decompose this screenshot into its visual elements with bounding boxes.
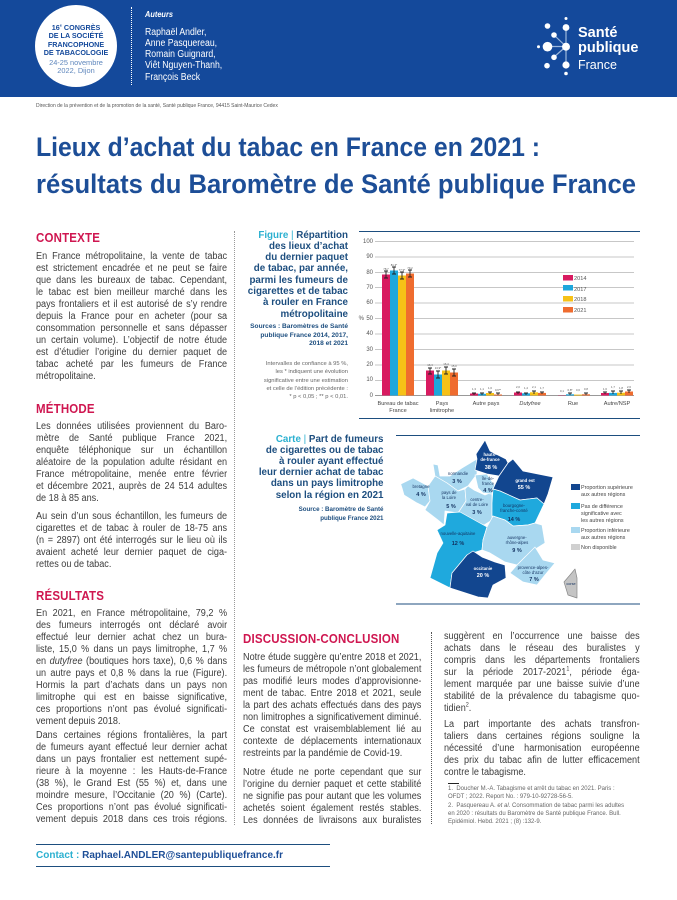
header band — [0, 0, 677, 97]
map of France: bretagne — [413, 484, 430, 489]
text: discussion 4: La part importante des achats transfron- — [444, 719, 640, 730]
figure caption: métropolitaine — [280, 309, 348, 320]
map of France: centre- — [470, 497, 484, 502]
map of France: 7 % — [529, 577, 539, 583]
bar chart: 40 — [366, 331, 374, 337]
dotted column divider left — [234, 231, 235, 825]
text: résultats 1: En 2021, en France métropolitaine, 79,2 % — [36, 608, 227, 618]
map of France: côte d’azur — [522, 570, 544, 575]
map legend: aux autres régions — [581, 492, 626, 498]
logo: Santé publique France: publique — [578, 40, 638, 56]
map caption: publique France 2021 — [320, 515, 384, 522]
bar chart: 90 — [366, 254, 374, 260]
logo: Santé publique France — [537, 17, 638, 76]
text: contexte — [36, 251, 228, 382]
authors: Anne Pasquereau, — [145, 38, 217, 49]
bar chart: 0 — [370, 393, 374, 399]
bar chart: Bureau de tabac — [377, 401, 419, 407]
text: résultats 2: dans un pays frontalier est nettement supé- — [36, 754, 227, 764]
map caption — [259, 434, 384, 522]
map caption: dans un pays limitrophe — [271, 478, 384, 489]
text: discussion 1: la part des achats effectués dans des pays — [243, 700, 421, 710]
map of France: nouvelle-aquitaine — [441, 531, 476, 536]
congress badge — [35, 5, 117, 87]
text: résultats 2: Ces proportions n’ont pas évolué significati- — [36, 802, 227, 812]
text: résultats 1: Hormis la part d’achats dans un pays non — [36, 680, 227, 690]
authors: Raphaël Andler, — [145, 26, 206, 38]
text: discussion 1: non limitrophes a significativement diminué. — [243, 712, 421, 722]
map of France: 3 % — [472, 510, 482, 516]
contact — [36, 844, 330, 867]
map of France: provence-alpes- — [518, 565, 549, 570]
authors: Romain Guignard, — [145, 49, 216, 60]
congress badge: 2022, Dijon — [57, 66, 95, 75]
region: Pays de la Loire — [425, 476, 466, 525]
footnotes: 1. Doucher M.-A. Tabagisme et arrêt du tabac en 2021. Paris : — [448, 786, 615, 792]
region: Centre-Val de Loire — [458, 486, 492, 525]
figure caption: du dernier paquet — [265, 252, 348, 263]
text: discussion 2 — [243, 767, 422, 826]
bar chart — [358, 231, 640, 419]
region: Nouvelle-Aquitaine — [430, 512, 487, 588]
map legend: Proportion inférieure — [581, 528, 630, 534]
text: discussion 3: achats dans le réseau des buralistes y — [444, 643, 640, 654]
heading: contexte: CONTEXTE — [36, 230, 100, 245]
text: contexte: pays frontaliers et il est autorisé de s’y rendre — [36, 299, 227, 310]
figure caption: publique France 2014, 2017, — [260, 332, 348, 339]
bar chart: 100 — [363, 239, 374, 245]
text: discussion 3: suggèrent en l’occurrence une baisse des — [444, 631, 640, 642]
title: résultats du Baromètre de Santé publique France — [36, 169, 636, 199]
bar chart: 10 — [366, 377, 374, 383]
footnotes: Epidémiol. Hebd. 2021 ; (8) :132-9. — [448, 819, 541, 825]
map legend: Pas de différence — [581, 504, 623, 510]
map of France: bourgogne- — [503, 503, 526, 508]
figure caption: parmi les fumeurs de — [249, 275, 348, 286]
bar chart: 16,4 — [443, 362, 449, 366]
footnotes — [448, 786, 624, 825]
map of France: 55 % — [518, 485, 530, 491]
text: résultats 1: ces proportions n’ont pas évolué significati- — [36, 704, 227, 714]
text: discussion 3: tidien2. — [444, 703, 471, 714]
text: contexte: consommation personnelle et sans dépasser — [36, 323, 227, 334]
text: discussion 2: ne signifie pas pour autant que les volumes — [243, 791, 421, 802]
bar chart: 16,4 — [427, 363, 433, 367]
region: Bourgogne-Franche-Comté — [492, 489, 544, 526]
bar chart: 1,6 — [488, 386, 492, 390]
text: méthode 2: (n = 2897) ont été interrogés sur le lieu où ils — [36, 535, 227, 546]
text: méthode 2 — [36, 511, 227, 570]
bar chart: 0,8* — [568, 388, 573, 392]
title: Lieux d’achat du tabac en France en 2021 : — [36, 132, 540, 162]
text: méthode 2: rettes ou de tabac. — [36, 559, 111, 570]
bar chart: 15,0 — [451, 364, 457, 368]
text: méthode 1: de 18 à 85 ans. — [36, 492, 99, 504]
bar chart: 0,6 — [576, 388, 580, 392]
map legend: les autres régions — [581, 518, 624, 524]
figure caption: Sources : Baromètres de Santé — [250, 323, 348, 330]
congress badge: FRANCOPHONE — [48, 40, 104, 49]
map of France: grand est — [515, 478, 535, 483]
text: méthode 1: Les données utilisées proviennent du Baro- — [36, 420, 227, 432]
region: Île-de-France — [475, 474, 495, 494]
logo: Santé publique France: Santé — [578, 25, 618, 41]
text: discussion 1 — [243, 652, 422, 758]
map of France: île-de- — [481, 476, 495, 481]
text: discussion 1: contexte de déplacements internationaux — [243, 736, 421, 746]
text: résultats 1: limitrophe qui est en baisse significative, — [36, 692, 227, 702]
bar chart: 1,7 — [540, 386, 544, 390]
heading: méthode: MÉTHODE — [36, 401, 95, 416]
bar chart: 50 — [366, 316, 374, 322]
congress badge: DE TABACOLOGIE — [44, 48, 108, 57]
map of France: 3 % — [452, 479, 462, 485]
bar chart: 1,3 — [472, 387, 476, 391]
map of France: 20 % — [477, 573, 489, 579]
bar chart: Pays — [436, 401, 448, 407]
text: résultats 1: en dutyfree (boutiques hors taxe), 0,6 % dans — [36, 656, 227, 666]
map legend — [571, 484, 633, 551]
title — [36, 132, 636, 199]
bar chart: 60 — [366, 300, 374, 306]
text: discussion 4 — [444, 719, 640, 778]
figure caption: et celle de l’édition précédente : — [266, 386, 348, 392]
text: résultats 2: moindre mesure, l’Occitanie (20 %) (Carte). — [36, 790, 227, 800]
map of France — [396, 435, 640, 604]
region: Hauts-de-France — [475, 440, 508, 476]
text: résultats 2: Dans certaines régions frontalières, la part — [36, 730, 227, 740]
text: contexte: le tabac est bien meilleur marché dans les — [36, 287, 227, 298]
region: Corse — [564, 569, 577, 598]
text: résultats 1: effectué leur dernier achat chez un bura- — [36, 632, 227, 642]
text: discussion 3: sur la période 2017-20211, période éga- — [444, 667, 640, 678]
figure caption: 2018 et 2021 — [309, 340, 348, 347]
region: Auvergne-Rhône-Alpes — [482, 516, 545, 565]
congress badge: 24-25 novembre — [49, 58, 103, 67]
bar chart: 13,9* — [435, 366, 442, 370]
bar chart: 77,9* — [399, 268, 406, 272]
figure caption: Intervalles de confiance à 95 %, — [266, 361, 348, 367]
map of France: corse — [566, 582, 576, 586]
text: discussion 3: lement marquée par une baisse suivie d’une — [444, 679, 640, 690]
congress badge: 16e CONGRÈS — [52, 23, 100, 32]
dotted column divider — [431, 632, 432, 824]
map of France: val de Loire — [466, 502, 489, 507]
bar chart: 78,7 — [383, 267, 389, 271]
text: méthode 2: avaient acheté leur dernier paquet de ciga- — [36, 547, 227, 558]
bar chart: 2,6 — [627, 385, 631, 389]
text: contexte: métropolitaine. — [36, 371, 96, 382]
chart legend: 2014 — [574, 276, 586, 282]
figure caption: significative entre une estimation — [264, 378, 348, 384]
bar chart: Dutyfree — [519, 401, 541, 407]
bar chart: 81,3* — [391, 263, 398, 267]
map of France: de-france — [480, 457, 500, 462]
map caption: Source : Baromètre de Santé — [299, 506, 384, 513]
text: contexte: que dans les bureaux de tabac. Cependant, — [36, 275, 227, 286]
bar chart: 1,6 — [603, 387, 607, 391]
figure caption: Figure | Répartition — [258, 230, 348, 240]
chart legend — [563, 275, 586, 314]
footnotes: en 2020 : résultats du Baromètre de Santé publique France. Bull. — [448, 811, 621, 817]
map of France: rhône-alpes — [506, 540, 528, 545]
bar chart: 0,1 — [560, 389, 564, 393]
text: discussion 2: l’origine du dernier paquet et cette stabilité — [243, 779, 421, 790]
text: discussion 1: pas modifié leurs modes d’approvisionne- — [243, 676, 421, 686]
text: résultats 1 — [36, 608, 227, 726]
map of France: la Loire — [442, 495, 457, 500]
map of France: pays de — [441, 490, 457, 495]
bar chart: % — [359, 316, 365, 322]
text: discussion 1: Ce constat est vraisemblablement lié au — [243, 724, 421, 734]
bar chart: 70 — [366, 285, 374, 291]
map of France: 38 % — [485, 465, 497, 471]
text: résultats 2: vement depuis 2018 dans ces trois régions. — [36, 814, 227, 824]
map of France: 9 % — [512, 548, 522, 554]
figure caption: les * indiquent une évolution — [275, 369, 348, 375]
dotted divider — [131, 7, 132, 85]
map of France: 5 % — [446, 504, 456, 510]
region: Normandie — [433, 459, 477, 491]
map legend: aux autres régions — [581, 535, 626, 541]
map caption: Carte | Part de fumeurs — [276, 434, 384, 444]
map of France: auvergne- — [507, 535, 527, 540]
text: méthode 2: Au sein d’un sous échantillon, les fumeurs de — [36, 511, 227, 522]
region: Occitanie — [450, 551, 506, 598]
text: discussion 4: taliers dans certaines régions souligne la — [444, 731, 640, 742]
bar chart: 80 — [366, 270, 374, 276]
text: résultats 1: liste, 15,0 % dans un pays limitrophe, 1,7 % — [36, 644, 227, 654]
text: contexte: tabac acheté par les fumeurs de France — [36, 359, 227, 370]
figure caption — [248, 230, 348, 400]
bar chart: 0,6** — [495, 388, 502, 392]
region: Grand Est — [493, 459, 553, 504]
map of France: occitanie — [474, 566, 493, 571]
bar chart: 0,8 — [584, 387, 588, 391]
bar chart: France — [389, 408, 407, 414]
bar chart: limitrophe — [430, 408, 454, 414]
text: résultats 1: un autre pays et 0,8 % dans la rue (Figure). — [36, 668, 227, 678]
authors: François Beck — [145, 72, 200, 83]
text: discussion 2: Les données de livraisons aux buralistes — [243, 815, 421, 826]
text: discussion 1: ment de tabac. Entre 2018 et 2021, seule — [243, 688, 421, 698]
text: discussion 3 — [444, 631, 640, 714]
figure caption: à rouler en France — [263, 297, 348, 308]
map legend: significative avec — [581, 511, 622, 517]
text: discussion 1: restreints par la pandémie de Covid-19. — [243, 748, 402, 758]
bar chart: Rue — [568, 401, 578, 407]
text: discussion 4: des prix du tabac afin de lutter efficacement — [444, 755, 640, 766]
bar chart: 30 — [366, 347, 374, 353]
text: contexte: un certain volume). L’objectif de notre étude — [36, 335, 227, 346]
text: méthode 2: cigarettes et de tabac à rouler de 18-75 ans — [36, 523, 227, 534]
logo: Santé publique France: France — [578, 58, 617, 72]
bar chart: 1,7 — [611, 385, 615, 389]
text: discussion 4: contre le tabagisme. — [444, 767, 526, 778]
text: résultats 2 — [36, 730, 228, 824]
text: contexte: est strictement encadrée et ne peut se faire — [36, 263, 227, 274]
bar chart: Autre pays — [473, 401, 500, 407]
region: Bretagne — [401, 478, 430, 507]
text: méthode 1: France métropolitaine, menée entre février — [36, 468, 227, 480]
map of France: 12 % — [452, 541, 464, 547]
bar chart: 1,8 — [619, 386, 623, 390]
region: Provence-Alpes-Côte d'Azur — [510, 547, 555, 585]
text: discussion 1: les fumeurs de métropole n’ont globalement — [243, 664, 421, 674]
figure caption: de tabac, par année, — [254, 263, 348, 274]
heading: résultats: RÉSULTATS — [36, 588, 104, 603]
text: discussion 3: compris dans les départements frontaliers — [444, 655, 640, 666]
map of France: 14 % — [508, 517, 520, 523]
text: contexte: est d’étudier l’origine du dernier paquet de — [36, 347, 227, 358]
bar chart: 2,1 — [532, 385, 536, 389]
text: discussion 2: achetés soient également restés stables. — [243, 803, 421, 814]
map legend: Proportion supérieure — [581, 485, 633, 491]
text: discussion 4: nécessité d’une harmonisation européenne — [444, 743, 640, 754]
map caption: leur dernier achat de tabac — [259, 467, 384, 478]
text: résultats 2: de fumeurs ayant effectué leur dernier achat — [36, 742, 227, 752]
text: discussion 1: Notre étude suggère qu’entre 2018 et 2021, — [243, 652, 421, 662]
figure caption: des lieux d’achat — [269, 241, 348, 252]
heading: discussion-conclusion: DISCUSSION-CONCLUSION — [243, 631, 399, 646]
text: résultats 2: rieure à la moyenne : les Hauts-de-France — [36, 766, 227, 776]
text: résultats 1: vement depuis 2018. — [36, 716, 120, 726]
chart legend: 2017 — [574, 287, 586, 293]
map legend: Non disponible — [581, 545, 617, 551]
bar chart: 1,1 — [480, 387, 484, 391]
map of France: 4 % — [483, 488, 493, 494]
bar chart: 1,4 — [524, 386, 528, 390]
text: méthode 1: mètre de Santé publique France 2021, — [36, 432, 227, 444]
text: discussion 2: Notre étude ne porte cependant que sur — [243, 767, 421, 778]
footnotes: OFDT ; 2022. Report No. : 979-10-92728-56-5. — [448, 794, 573, 800]
bar chart: 20 — [366, 362, 374, 368]
authors — [144, 9, 222, 83]
bar chart: Autre/NSP — [604, 401, 630, 407]
map of France: 4 % — [416, 492, 426, 498]
map caption: de cigarettes ou de tabac — [266, 445, 384, 456]
text: résultats 1: des fumeurs interrogés ont déclaré avoir — [36, 620, 227, 630]
authors: Viêt Nguyen-Thanh, — [145, 60, 222, 71]
affiliation: Direction de la prévention et de la promotion de la santé, Santé publique France, 94415 Saint-Maurice Cedex — [36, 103, 278, 109]
figure caption: * p < 0,05 ; ** p < 0,01. — [289, 394, 348, 400]
text: méthode 1: enquête téléphonique sur un échantillon — [36, 444, 227, 456]
map of France: hauts- — [484, 452, 497, 457]
authors: Auteurs — [145, 9, 173, 19]
map of France: franche-comté — [500, 508, 528, 513]
congress badge: DE LA SOCIÉTÉ — [49, 31, 103, 40]
text: méthode 1: et décembre 2021, auprès de 24 514 adultes — [36, 480, 227, 492]
figure caption: cigarettes et de tabac — [248, 286, 348, 297]
text: contexte: En France métropolitaine, la vente de tabac — [36, 251, 227, 262]
text: méthode 1: aléatoire de la population adulte résidant en — [36, 456, 227, 468]
chart legend: 2018 — [574, 297, 586, 303]
contact: Contact : Raphael.ANDLER@santepubliquefrance.fr — [36, 850, 283, 861]
map caption: selon la région en 2021 — [276, 490, 384, 501]
footnote rule — [448, 783, 459, 784]
footnotes: 2. Pasquereau A. et al. Consommation de tabac parmi les adultes — [448, 803, 624, 809]
text: méthode 1 — [36, 420, 227, 504]
bar chart: 79,2 — [407, 266, 413, 270]
map of France: france — [482, 481, 495, 486]
text: contexte: depuis la France pour en acheter (pour sa — [36, 311, 227, 322]
text: discussion 3: stabilité de la prévalence du tabagisme quo- — [444, 691, 640, 702]
chart legend: 2021 — [574, 308, 586, 314]
map of France: normandie — [448, 471, 469, 476]
bar chart: 2,0 — [516, 385, 520, 389]
map caption: à rouler ayant effectué — [279, 456, 384, 467]
text: résultats 2: (38 %), le Grand Est (55 %) et, dans une — [36, 778, 227, 788]
